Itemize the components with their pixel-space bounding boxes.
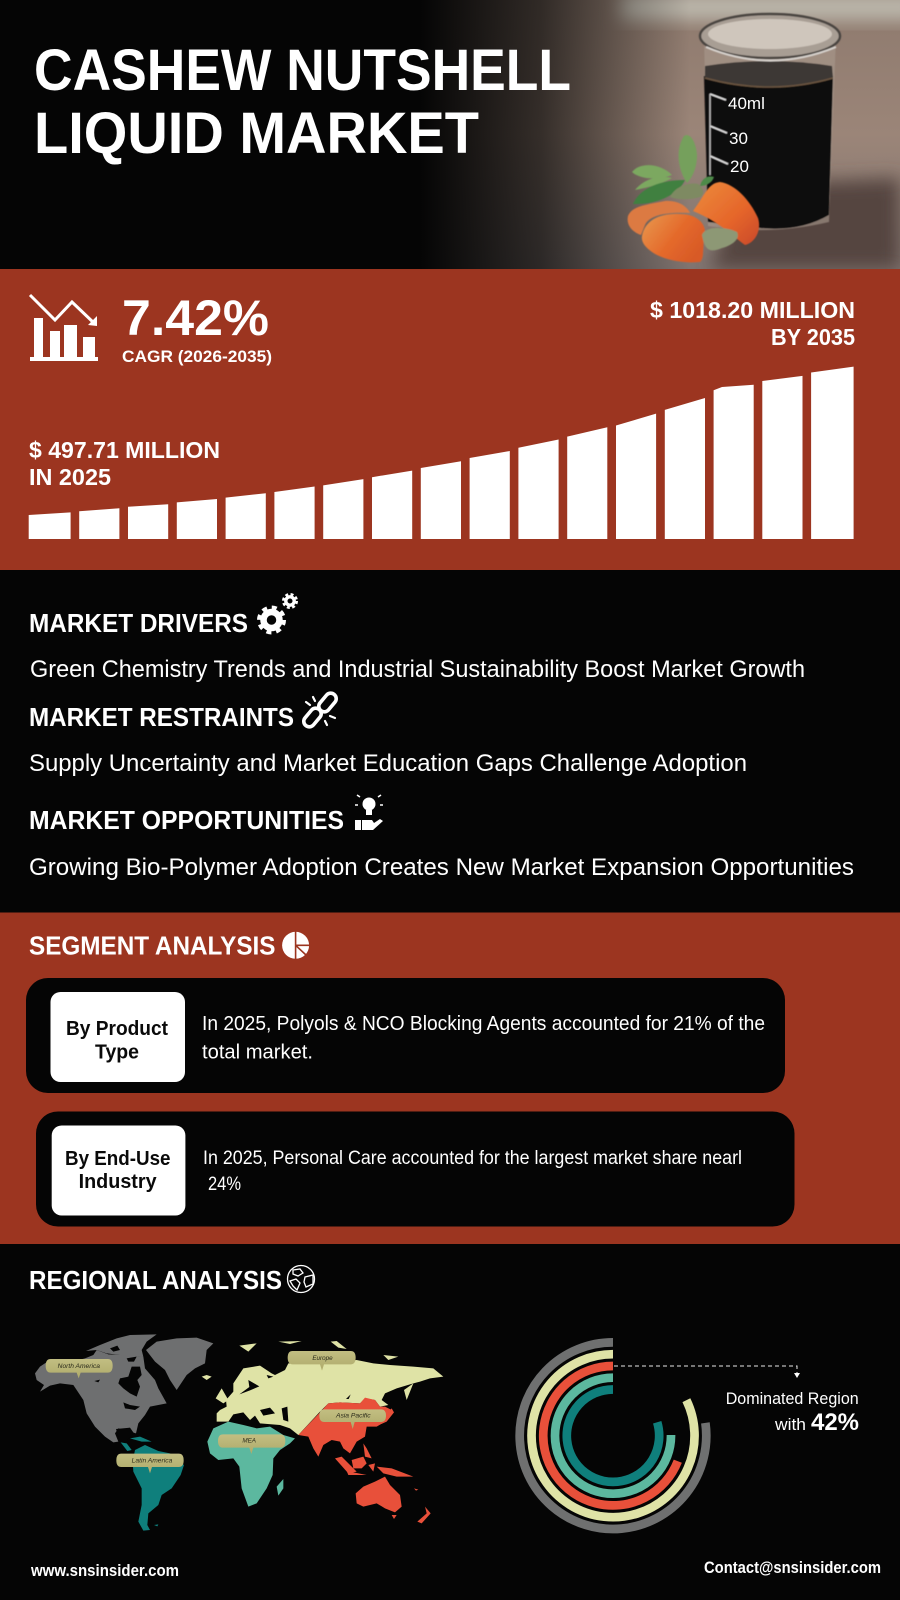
heading: regional analysis: REGIONAL ANALYSIS [29, 1265, 282, 1295]
card: by end-use industry [36, 1112, 794, 1226]
card: by product type: By Product [66, 1018, 168, 1040]
heading: market drivers: MARKET DRIVERS [29, 608, 248, 638]
card: by end-use industry: 24% [208, 1174, 241, 1195]
callout: dominated region with 42% [726, 1390, 859, 1436]
2025 value: $ 497.71 MILLION [29, 437, 220, 463]
icon: gears [259, 594, 297, 632]
card: by end-use industry: Industry [79, 1171, 157, 1193]
card: by product type: In 2025, Polyols & NCO Blocking Agents accounted for 21% of the [202, 1013, 765, 1035]
2035 value: $ 1018.20 MILLION [650, 297, 855, 323]
header photo: beaker of cashew nutshell liquid with cashew apples [420, 0, 900, 269]
title: CASHEW NUTSHELL [34, 38, 571, 103]
region: North America [35, 1334, 213, 1442]
heading: market opportunities: MARKET OPPORTUNITIES [29, 805, 344, 835]
callout: Asia Pacific: Asia Pacific [335, 1413, 372, 1420]
heading: market restraints: MARKET RESTRAINTS [29, 702, 294, 732]
CAGR value: 7.42% [122, 290, 269, 346]
callout: Latin America [116, 1454, 184, 1473]
card: by product type: Type [95, 1042, 139, 1064]
panel: segment analysis [0, 912, 900, 1244]
icon: declining chart arrow with bars [30, 295, 98, 361]
text: restraint: Supply Uncertainty and Market Education Gaps Challenge Adoption [29, 750, 747, 777]
footer: website: www.snsinsider.com [30, 1562, 179, 1580]
card: by end-use industry: By End-Use [65, 1148, 170, 1170]
2035 value [650, 297, 855, 350]
icon: hand holding light bulb [355, 795, 383, 830]
text: driver: Green Chemistry Trends and Industrial Sustainability Boost Market Growth [30, 656, 805, 683]
2035 value: BY 2035 [771, 324, 855, 350]
icon: globe [288, 1266, 314, 1292]
callout: Europe [288, 1351, 356, 1371]
callout: dominated region with 42%: Dominated Region [726, 1390, 859, 1408]
bar chart: market growth [29, 367, 854, 539]
region: Asia Pacific [298, 1398, 431, 1523]
callout: dominated region with 42%: 42% [811, 1409, 859, 1436]
callout: Europe: Europe [312, 1355, 333, 1362]
callout: dominated region with 42%: with [774, 1416, 806, 1434]
arrow: dashed leader to dominated region [614, 1366, 800, 1378]
2025 value: IN 2025 [29, 464, 111, 490]
title [34, 38, 571, 166]
text: opportunity: Growing Bio-Polymer Adoption Creates New Market Expansion Opportunities [29, 854, 854, 881]
cashew fruit [628, 135, 759, 262]
region: Latin America [121, 1437, 184, 1531]
card: by product type: total market. [202, 1042, 313, 1064]
beaker scale marks [728, 94, 765, 176]
region: Europe and North Asia [202, 1341, 443, 1435]
callout: MEA [218, 1434, 285, 1454]
card: by end-use industry: In 2025, Personal Care accounted for the largest market share nearl [203, 1148, 742, 1169]
radial bar chart: regional share [520, 1342, 706, 1529]
world map [35, 1334, 443, 1531]
callout: North America [46, 1359, 113, 1378]
beaker scale marks: 20 [730, 157, 749, 176]
callout: Asia Pacific [319, 1409, 386, 1429]
callout: MEA: MEA [242, 1438, 256, 1445]
footer: contact email: Contact@snsinsider.com [704, 1559, 881, 1577]
region: Middle East and Africa [207, 1422, 295, 1507]
icon: broken chain link [302, 691, 338, 729]
panel: market size and growth [0, 269, 900, 570]
card: by product type [26, 978, 785, 1093]
icon: pie chart [282, 931, 310, 959]
beaker scale marks: 40ml [728, 94, 765, 113]
panel: market drivers, restraints and opportunities [29, 594, 854, 881]
beaker scale marks: 30 [729, 129, 748, 148]
callout: Latin America: Latin America [132, 1458, 173, 1465]
2025 value [29, 437, 220, 490]
beaker [700, 14, 840, 230]
callout: North America: North America [58, 1363, 100, 1370]
title: LIQUID MARKET [34, 101, 479, 166]
heading: segment analysis: SEGMENT ANALYSIS [29, 930, 276, 960]
CAGR label: CAGR (2026-2035) [122, 347, 272, 366]
